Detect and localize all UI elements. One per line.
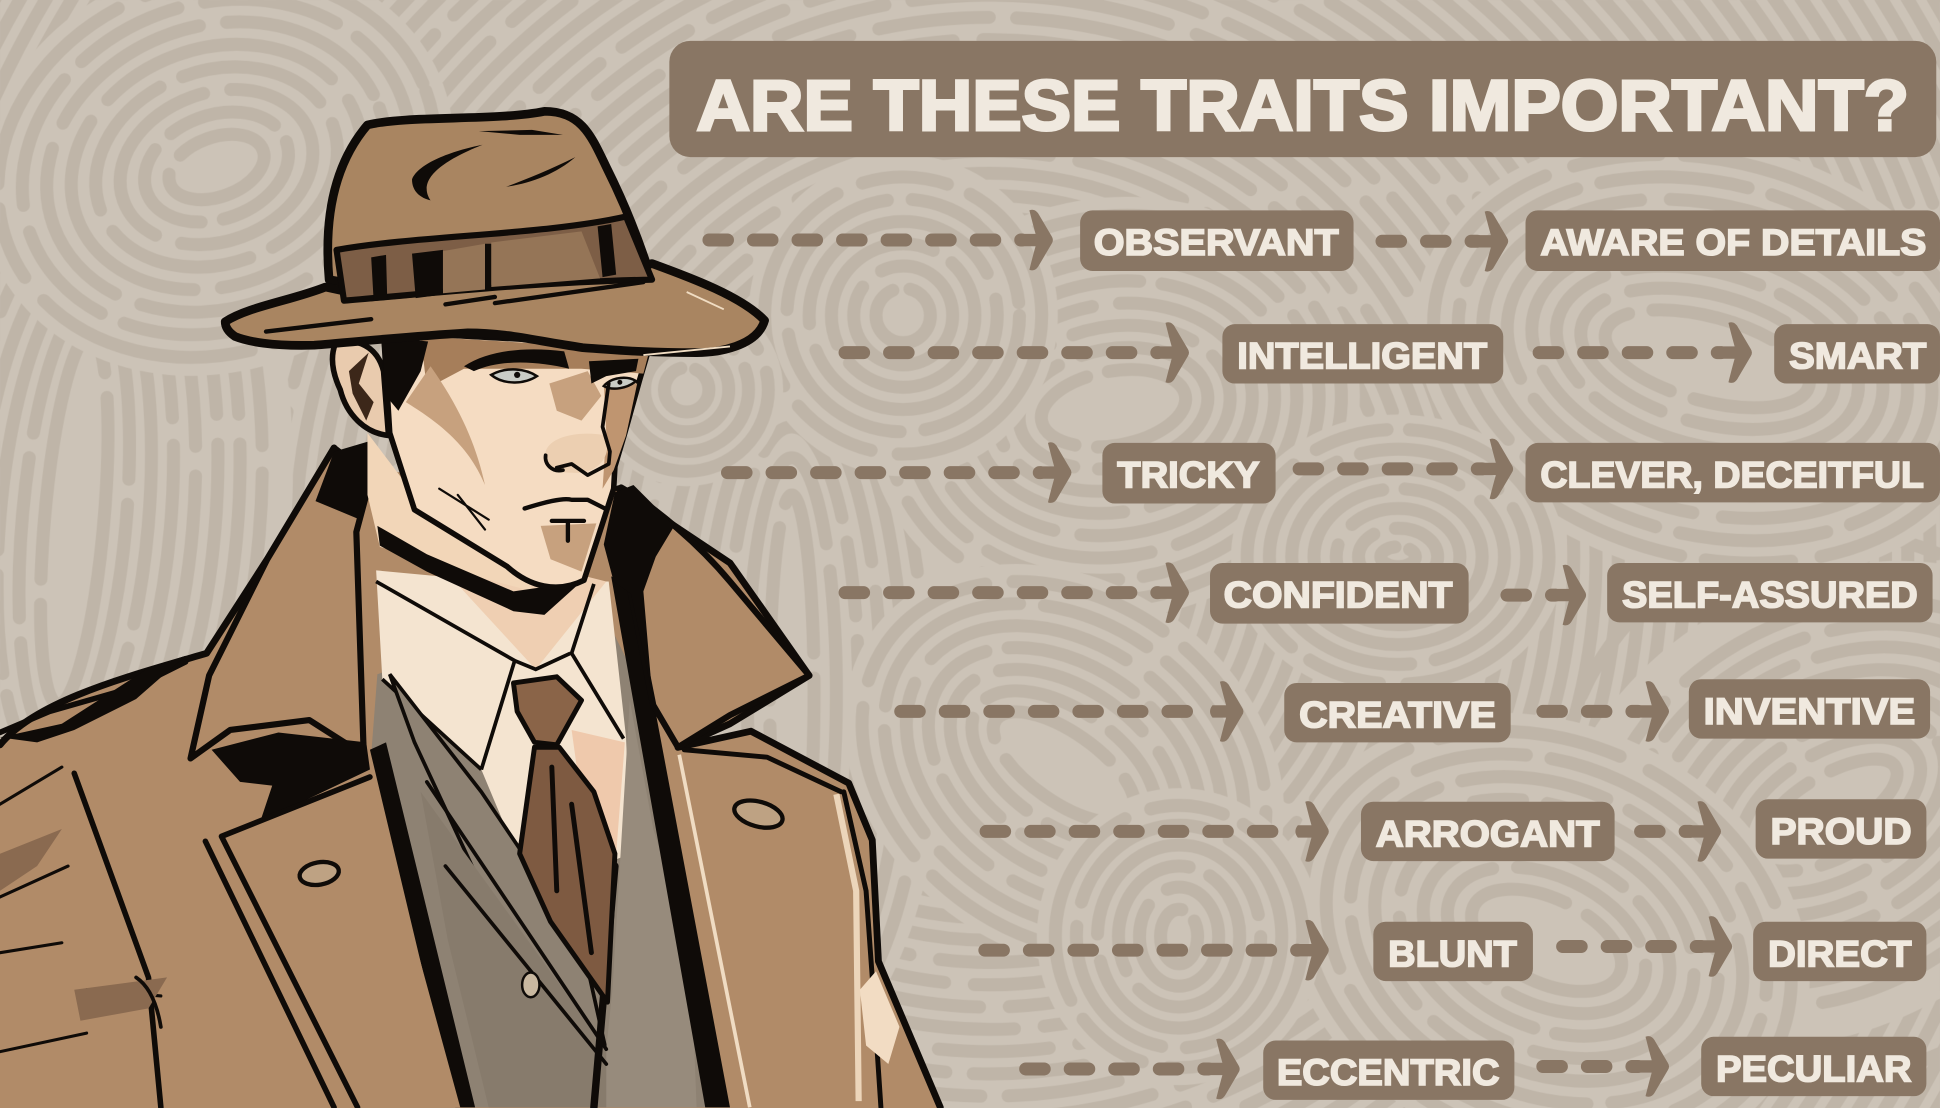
row: eccentric: ECCENTRIC bbox=[1277, 1051, 1500, 1093]
row: observant: OBSERVANT bbox=[1094, 221, 1339, 263]
face shadows bbox=[406, 366, 637, 572]
title banner: ARE THESE TRAITS IMPORTANT? bbox=[697, 66, 1909, 146]
row: blunt bbox=[985, 916, 1926, 981]
inner ear bbox=[349, 353, 374, 421]
right shoulder lines bbox=[679, 750, 899, 1107]
title banner bbox=[669, 41, 1936, 157]
hat crease lines bbox=[412, 130, 575, 200]
row: arrogant: PROUD bbox=[1770, 810, 1912, 852]
row: observant: AWARE OF DETAILS bbox=[1540, 221, 1926, 263]
forehead shade bbox=[421, 337, 650, 388]
row: creative: INVENTIVE bbox=[1704, 690, 1915, 732]
hat crown bbox=[328, 111, 648, 309]
row: intelligent: SMART bbox=[1789, 335, 1927, 377]
black band under jaw bbox=[377, 526, 582, 615]
row: blunt: BLUNT bbox=[1388, 932, 1517, 974]
coat body bbox=[0, 448, 940, 1108]
left lapel and shoulder lines bbox=[0, 656, 460, 1107]
thick coat edges bbox=[370, 577, 730, 1107]
row: blunt: DIRECT bbox=[1768, 932, 1912, 974]
row: eccentric: PECULIAR bbox=[1716, 1047, 1912, 1089]
hat brim bbox=[225, 264, 765, 353]
row: tricky: CLEVER, DECEITFUL bbox=[1540, 453, 1924, 495]
left collar bbox=[191, 448, 371, 758]
row: confident: CONFIDENT bbox=[1224, 573, 1453, 615]
brows, eyes, nose, mouth bbox=[439, 349, 638, 541]
face bbox=[384, 332, 650, 587]
row: confident: SELF-ASSURED bbox=[1622, 573, 1918, 615]
row: creative: CREATIVE bbox=[1299, 693, 1496, 735]
row: observant bbox=[709, 210, 1940, 272]
row: creative bbox=[901, 679, 1930, 742]
row: intelligent bbox=[845, 322, 1940, 384]
neck bbox=[367, 433, 533, 591]
right collar bbox=[621, 487, 809, 747]
row: tricky: TRICKY bbox=[1117, 453, 1260, 495]
hair bbox=[381, 337, 428, 411]
row: confident bbox=[845, 562, 1933, 625]
buttons bbox=[298, 796, 786, 997]
vest and inner shirt bbox=[371, 544, 730, 1107]
row: arrogant: ARROGANT bbox=[1376, 812, 1600, 854]
black wedge under collar bbox=[212, 732, 370, 823]
row: tricky bbox=[728, 439, 1940, 504]
black shadow left of neck bbox=[316, 442, 371, 520]
black shadow right of neck bbox=[604, 485, 674, 693]
hat band bbox=[266, 217, 730, 355]
row: eccentric bbox=[1026, 1036, 1926, 1100]
row: arrogant bbox=[986, 799, 1926, 862]
ear bbox=[332, 342, 389, 436]
tie bbox=[513, 677, 615, 1002]
detective illustration bbox=[0, 111, 940, 1108]
row: intelligent: INTELLIGENT bbox=[1237, 335, 1487, 377]
